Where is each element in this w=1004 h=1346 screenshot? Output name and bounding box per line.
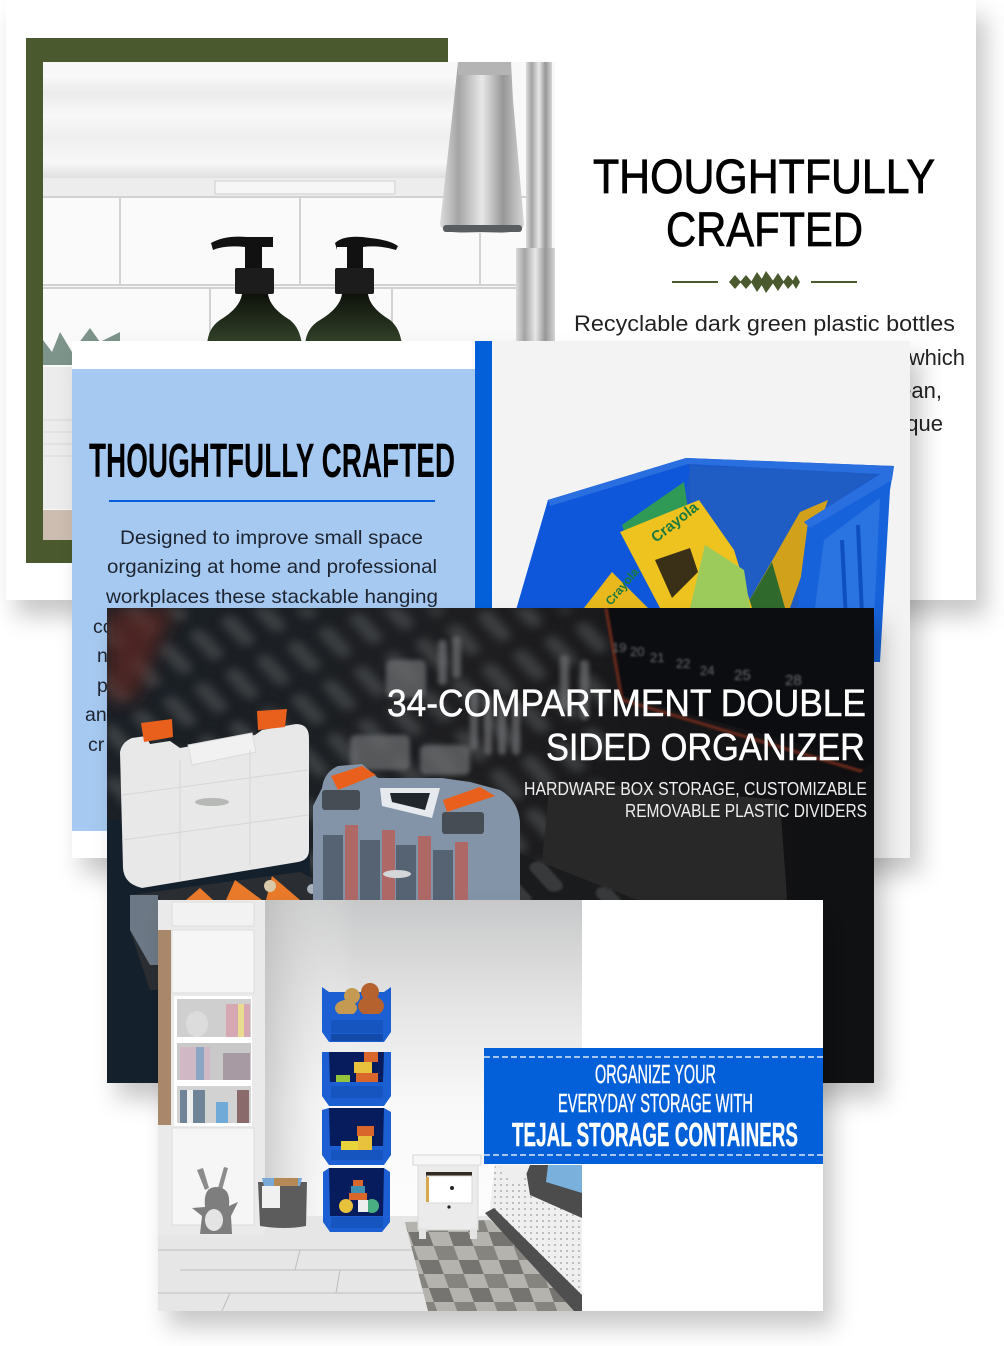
crayon box right bbox=[745, 500, 828, 608]
faucet pipe bbox=[526, 62, 552, 252]
subheading bbox=[524, 779, 867, 821]
orange latches bbox=[141, 719, 173, 742]
blurred tool wall background: 21 bbox=[650, 650, 664, 665]
description text: co bbox=[93, 616, 114, 638]
heading bbox=[593, 151, 935, 257]
dark number panel bbox=[608, 608, 742, 728]
description text: p bbox=[97, 675, 108, 697]
stitched lines bbox=[484, 1057, 823, 1155]
bin with stacking rings bbox=[323, 1168, 390, 1232]
photo: blue bin with crayons bbox=[492, 341, 910, 858]
ornament divider bbox=[672, 271, 857, 293]
bin with small toys bbox=[322, 1108, 391, 1165]
description text: clean, bbox=[883, 378, 942, 403]
closed gray organizer bbox=[313, 764, 520, 900]
description text: organizing at home and professional bbox=[107, 556, 437, 578]
heading: CRAFTED bbox=[666, 204, 863, 257]
description text bbox=[85, 527, 438, 756]
blurred tool wall background: 20 bbox=[630, 644, 644, 659]
bin with teddy bears bbox=[322, 983, 391, 1042]
banner text bbox=[512, 1059, 798, 1153]
gray basket bbox=[258, 1178, 307, 1228]
bed with dotted skirt bbox=[485, 1165, 582, 1311]
heading rule bbox=[109, 500, 435, 502]
description text: which bbox=[908, 345, 965, 370]
photo: blue bin with crayons: Crayola bbox=[648, 498, 702, 546]
faucet head bbox=[440, 62, 524, 233]
blue banner bbox=[484, 1048, 823, 1164]
subheading: HARDWARE BOX STORAGE, CUSTOMIZABLE bbox=[524, 779, 867, 799]
heading: THOUGHTFULLY bbox=[593, 151, 935, 204]
description text: Recyclable dark green plastic bottles bbox=[574, 311, 955, 336]
blurred tool wall background: 24 bbox=[700, 663, 714, 678]
blurred tool wall background: 19 bbox=[612, 640, 626, 655]
toy rabbit bbox=[192, 1167, 238, 1234]
light blue text panel bbox=[72, 369, 475, 831]
bin left wall bbox=[516, 458, 690, 610]
floor bbox=[158, 1216, 495, 1311]
heading bbox=[387, 683, 866, 769]
panel: double sided organizer banner bbox=[107, 608, 874, 1083]
bin interior bbox=[546, 458, 894, 509]
open organizer base bbox=[130, 872, 345, 990]
bin with blocks bbox=[322, 1052, 391, 1106]
blurred tool wall background: 25 bbox=[734, 667, 751, 684]
blurred tool wall background bbox=[107, 608, 874, 1083]
blue divider bar bbox=[475, 341, 492, 858]
open organizer lid bbox=[120, 709, 309, 888]
photo: kitchen sink with soap bottles bbox=[20, 62, 555, 540]
blurred tool wall background: 22 bbox=[676, 656, 690, 671]
crayon box green bbox=[622, 482, 688, 530]
stacked blue bins bbox=[322, 983, 391, 1232]
banner text: ORGANIZE YOUR bbox=[595, 1059, 716, 1089]
bin rim bbox=[548, 458, 894, 528]
dark fabric panel bbox=[542, 780, 787, 900]
bottle left bbox=[207, 237, 302, 345]
heading: 34-COMPARTMENT DOUBLE bbox=[387, 683, 866, 725]
description text: Designed to improve small space bbox=[120, 527, 423, 549]
description text: n bbox=[97, 645, 108, 667]
description text bbox=[574, 311, 965, 436]
bin right wall bbox=[790, 466, 894, 662]
heading: SIDED ORGANIZER bbox=[546, 727, 865, 769]
description text: workplaces these stackable hanging bbox=[105, 586, 438, 608]
banner text: TEJAL STORAGE CONTAINERS bbox=[512, 1116, 798, 1153]
crayon box yellow bbox=[620, 500, 752, 608]
wardrobe bbox=[158, 900, 265, 1235]
subheading: REMOVABLE PLASTIC DIVIDERS bbox=[625, 801, 867, 821]
description text: an bbox=[85, 704, 107, 726]
checkered rug bbox=[405, 1220, 582, 1311]
panel: green bottles card bbox=[6, 0, 976, 600]
bookshelf bbox=[174, 996, 252, 1126]
panel: stackable bins card bbox=[72, 341, 910, 858]
panel: storage containers room bbox=[158, 900, 823, 1311]
description text: unique bbox=[877, 411, 943, 436]
photo: room with wall mounted bins bbox=[158, 900, 582, 1311]
succulent plant bbox=[43, 328, 120, 365]
photo: blue bin with crayons: Crayola bbox=[603, 565, 642, 608]
white planter bbox=[43, 367, 72, 509]
crayon box lower left bbox=[584, 572, 648, 608]
wood strip bbox=[158, 930, 171, 1125]
bottle right bbox=[305, 237, 402, 345]
banner text: EVERYDAY STORAGE WITH bbox=[558, 1088, 753, 1118]
nightstand bbox=[413, 1155, 481, 1239]
green frame bbox=[26, 38, 448, 563]
description text: cr bbox=[88, 734, 105, 756]
blurred tool wall background: 28 bbox=[785, 672, 802, 689]
heading: THOUGHTFULLY CRAFTED bbox=[89, 435, 455, 488]
